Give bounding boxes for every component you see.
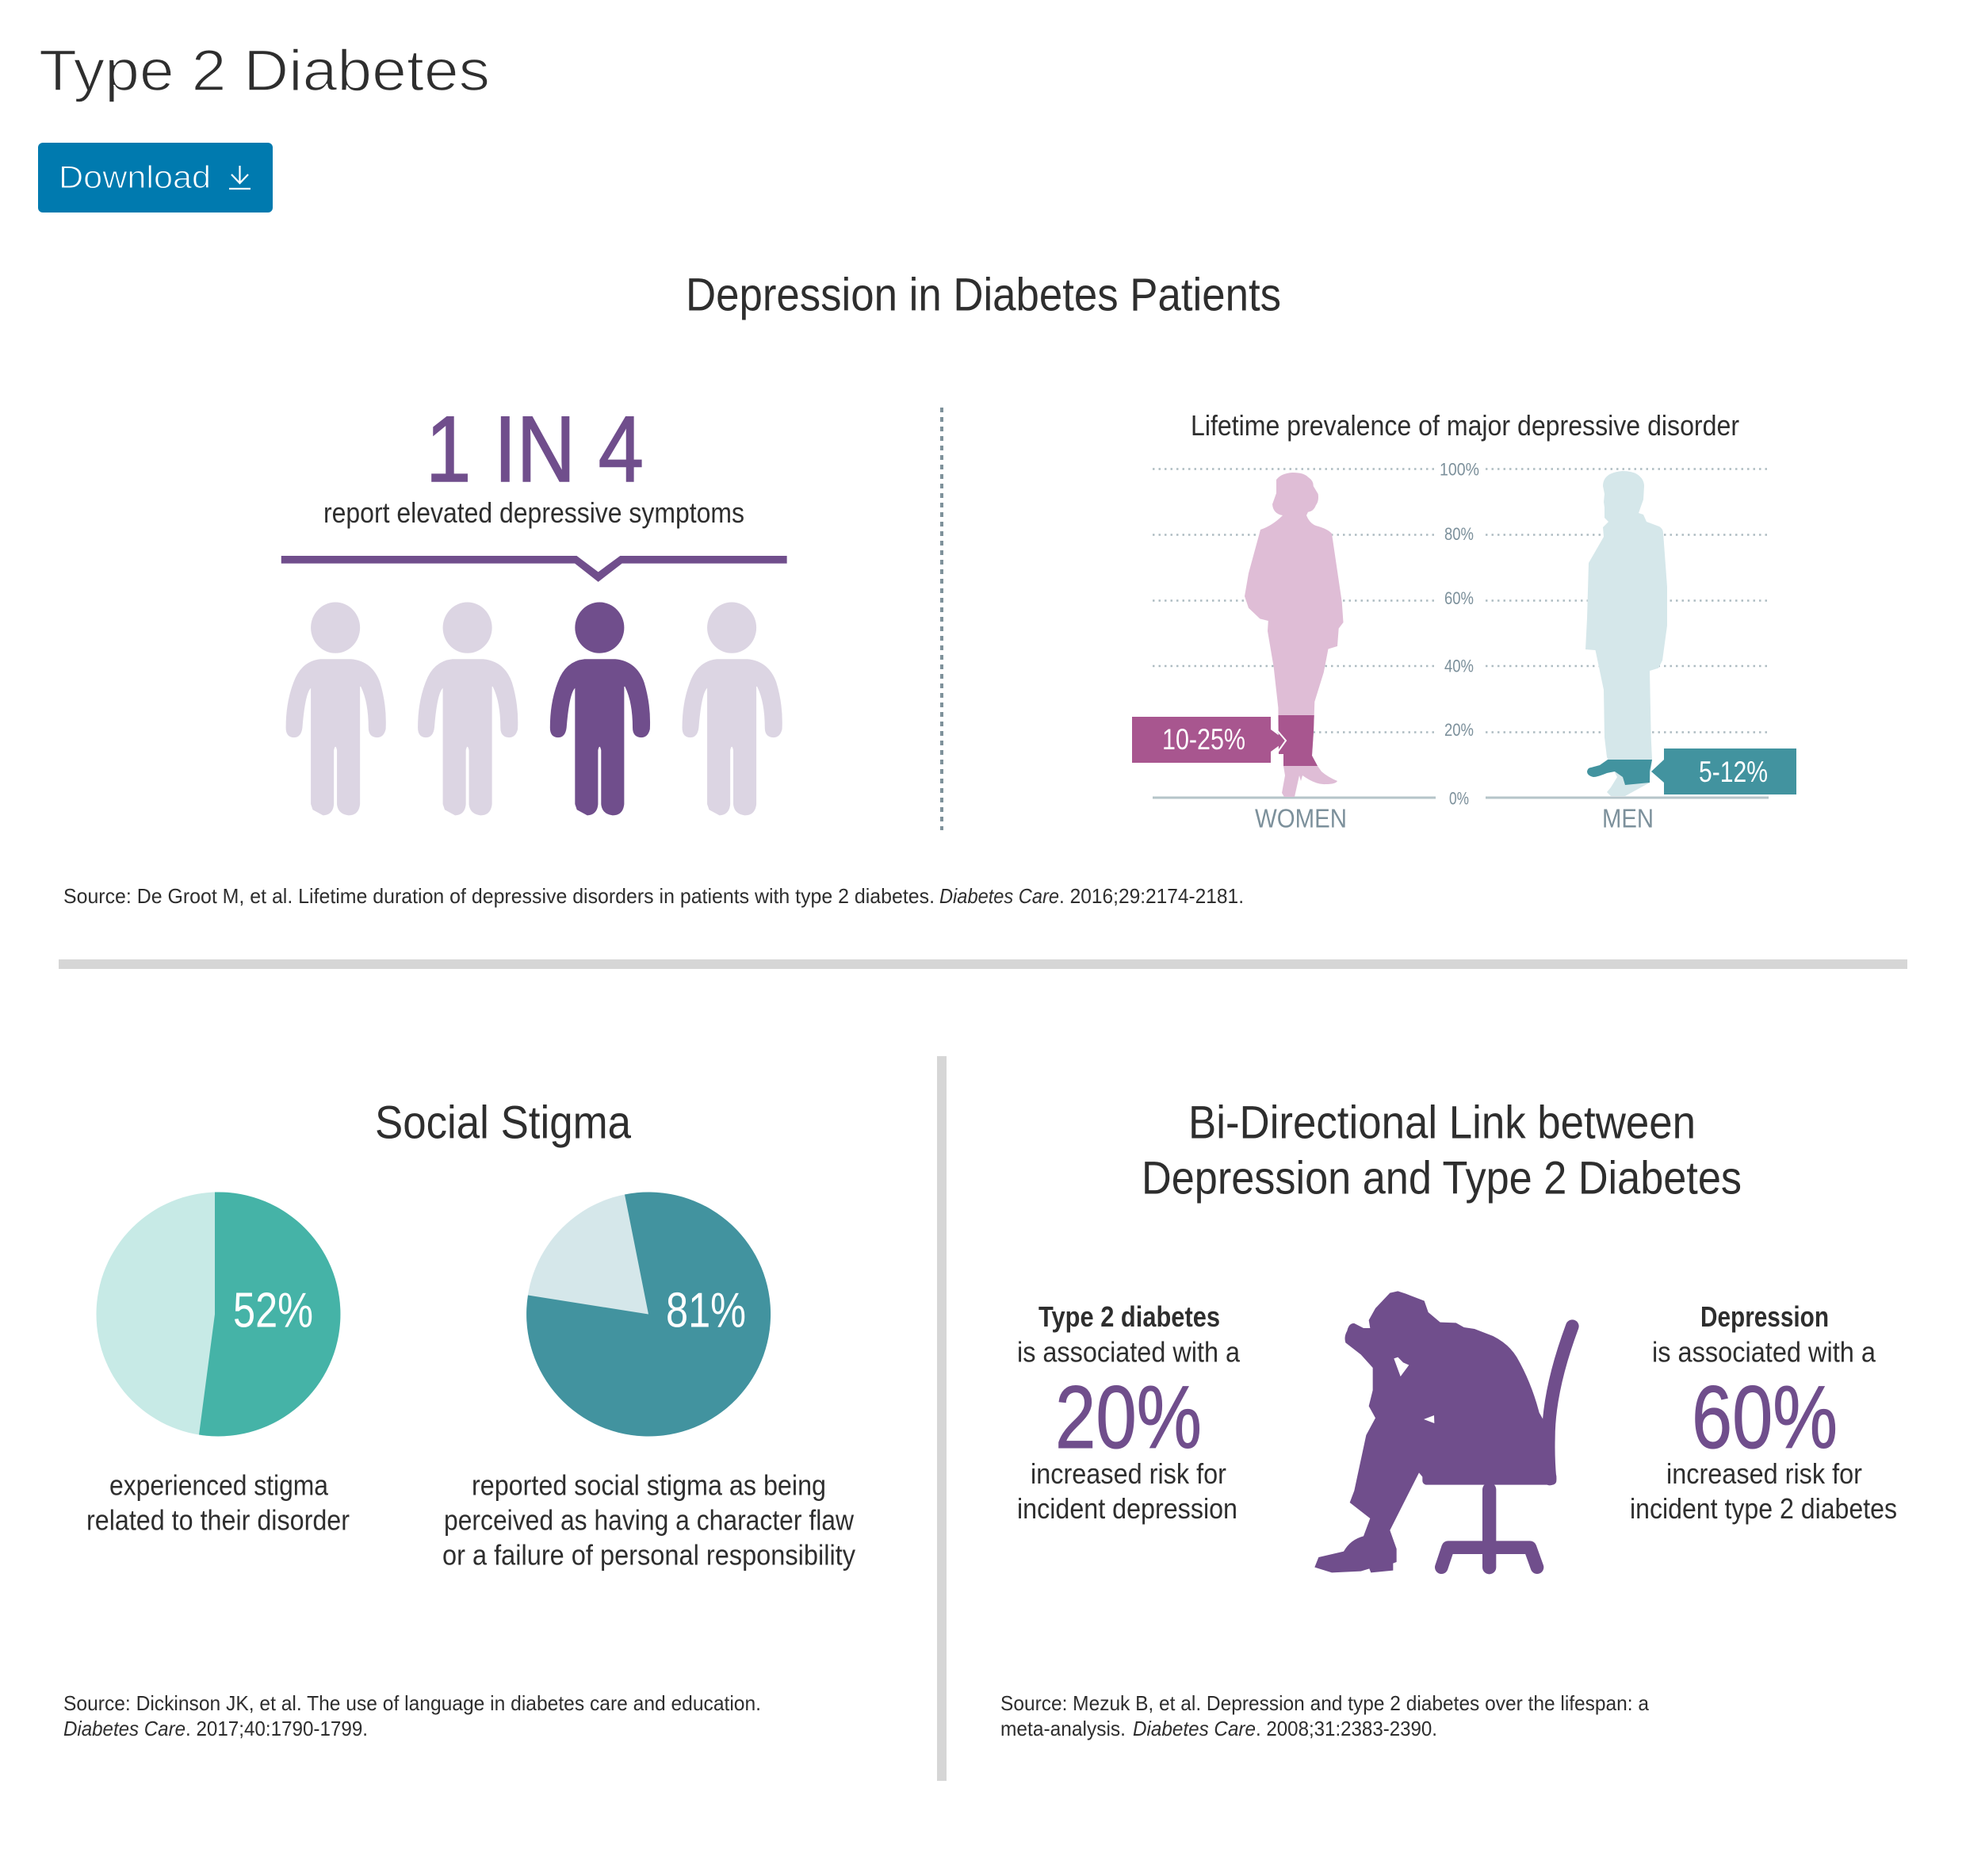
chart heading: Lifetime prevalence of major depressive disorder: [1191, 409, 1739, 442]
icon: depressed man on chair: [1314, 1291, 1572, 1574]
source: bi-directional link: . 2008;31:2383-2390.: [1256, 1717, 1437, 1740]
stat caption: report elevated depressive symptoms: [323, 496, 744, 529]
callout: men 5-12%: 5-12%: [1699, 756, 1768, 788]
axis labels: 100%: [1440, 460, 1479, 479]
stat block: depression 60%: Depression: [1700, 1300, 1829, 1333]
panel: social stigma: [86, 1097, 855, 1572]
person icons: [286, 603, 782, 815]
stat block: type 2 diabetes 20%: is associated with a: [1017, 1335, 1241, 1369]
label: women: WOMEN: [1255, 804, 1347, 833]
stat block: depression 60%: [1630, 1300, 1897, 1525]
stat block: depression 60%: is associated with a: [1652, 1335, 1876, 1369]
silhouette: woman: [1245, 473, 1343, 797]
source: social stigma: Diabetes Care: [63, 1717, 186, 1740]
pie chart: 81%: 81%: [666, 1283, 746, 1338]
heading: bi-directional link: Bi-Directional Link between: [1188, 1097, 1696, 1148]
download button: [38, 143, 273, 212]
source: social stigma: . 2017;40:1790-1799.: [186, 1717, 368, 1740]
axis labels: [1440, 460, 1479, 809]
silhouette: man: [1585, 471, 1667, 796]
stat block: type 2 diabetes 20%: increased risk for: [1031, 1457, 1226, 1490]
source: bi-directional link: meta-analysis.: [1000, 1717, 1126, 1740]
icon: person 3 highlighted: [550, 603, 650, 815]
pie caption: 81%: [442, 1468, 855, 1572]
big stat: 1 in 4: 1 IN 4: [426, 397, 644, 502]
axis labels: 60%: [1444, 588, 1474, 608]
axis labels: 0%: [1449, 788, 1469, 809]
pie caption: 52%: experienced stigma: [109, 1468, 329, 1502]
stat block: type 2 diabetes 20%: [1017, 1300, 1241, 1525]
title: Type 2 Diabetes: [39, 39, 490, 103]
pie caption: 81%: perceived as having a character flaw: [444, 1503, 855, 1537]
heading: social stigma: Social Stigma: [375, 1097, 632, 1148]
stat block: type 2 diabetes 20%: incident depression: [1017, 1492, 1237, 1525]
source: depression: . 2016;29:2174-2181.: [1059, 884, 1244, 908]
source: social stigma: [63, 1691, 761, 1740]
pie caption: 52%: related to their disorder: [86, 1503, 350, 1537]
source: social stigma: Source: Dickinson JK, et al. The use of language in diabetes care and education.: [63, 1691, 761, 1715]
source: bi-directional link: [1000, 1691, 1649, 1740]
source: bi-directional link: Source: Mezuk B, et al. Depression and type 2 diabetes over the lifespan: a: [1000, 1691, 1649, 1715]
stat block: type 2 diabetes 20%: Type 2 diabetes: [1038, 1300, 1220, 1333]
panel: 1 in 4: [281, 397, 787, 815]
axis labels: 40%: [1444, 657, 1474, 676]
stat block: depression 60%: 60%: [1692, 1368, 1838, 1467]
axis labels: 20%: [1444, 720, 1474, 740]
pie caption: 81%: or a failure of personal responsibility: [442, 1538, 855, 1572]
axis labels: 80%: [1444, 524, 1474, 544]
panel: bi-directional link: [1017, 1097, 1897, 1574]
callout: men 5-12%: [1651, 748, 1796, 794]
panel: lifetime prevalence chart: [1132, 409, 1796, 833]
heading: depression in diabetes patients: Depression in Diabetes Patients: [686, 270, 1281, 320]
icon: person 4: [683, 603, 782, 815]
stat block: depression 60%: incident type 2 diabetes: [1630, 1492, 1897, 1525]
pie caption: 81%: reported social stigma as being: [472, 1468, 826, 1502]
bracket pointer: [281, 556, 787, 582]
pie caption: 52%: [86, 1468, 350, 1537]
source: depression: Source: De Groot M, et al. Lifetime duration of depressive disorders in patients with type 2 diabetes.: [63, 884, 935, 908]
stat block: type 2 diabetes 20%: 20%: [1055, 1368, 1202, 1467]
pie chart: 52%: 52%: [233, 1283, 313, 1338]
download button: Download: [59, 160, 211, 195]
stat block: depression 60%: increased risk for: [1666, 1457, 1862, 1490]
pie chart: 52%: [97, 1192, 341, 1437]
callout: women 10-25%: [1132, 717, 1286, 763]
callout: women 10-25%: 10-25%: [1162, 723, 1245, 756]
heading: bi-directional link: [1142, 1097, 1742, 1204]
pie chart: 81%: [526, 1193, 771, 1437]
source: bi-directional link: Diabetes Care: [1133, 1717, 1256, 1740]
heading: bi-directional link: Depression and Type 2 Diabetes: [1142, 1153, 1742, 1204]
label: men: MEN: [1602, 804, 1654, 833]
icon: person 1: [286, 603, 386, 815]
icon: person 2: [418, 603, 518, 815]
source: depression: Diabetes Care: [939, 884, 1059, 908]
